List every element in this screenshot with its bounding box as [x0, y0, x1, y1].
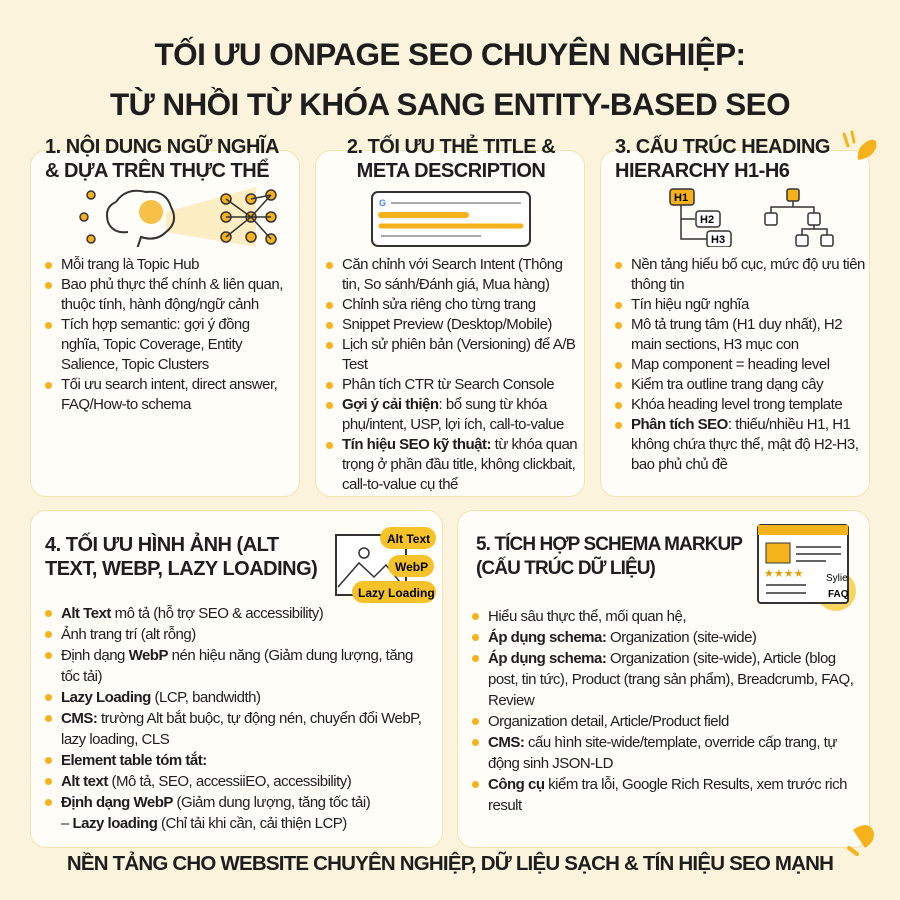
bullet list 5: Áp dụng schema: Organization (site-wide), Article (blog post, tin tức), Product (trang sản phẩm), Breadcrumb, FAQ, Review: [488, 650, 853, 709]
heading 5: (CẤU TRÚC DỮ LIỆU): [476, 558, 655, 579]
heading 2: [347, 134, 556, 182]
icon: splash bottom right: [846, 825, 874, 856]
panel: heading hierarchy: [600, 150, 870, 497]
bullet list 2: Căn chỉnh với Search Intent (Thông tin, So sánh/Đánh giá, Mua hàng): [342, 256, 562, 293]
bullet list 4: Ảnh trang trí (alt rỗng): [61, 626, 196, 643]
heading 4: TEXT, WEBP, LAZY LOADING): [45, 558, 317, 580]
heading 4: 4. TỐI ƯU HÌNH ẢNH (ALT: [45, 534, 279, 556]
bullet list 3: Kiểm tra outline trang dạng cây: [631, 376, 823, 393]
icon: structured data window: [757, 524, 856, 611]
icon: heading tree: [669, 188, 834, 247]
icon: image tags: Alt Text: [387, 532, 430, 546]
bullet list 2: Chỉnh sửa riêng cho từng trang: [342, 296, 536, 313]
bullet list 4: – Lazy loading (Chỉ tải khi cần, cải thiện LCP): [61, 815, 347, 832]
bullet list 4: CMS: trường Alt bắt buộc, tự động nén, chuyển đổi WebP, lazy loading, CLS: [61, 710, 421, 748]
icon: brain network: [79, 187, 277, 247]
bullet list 5: Áp dụng schema: Organization (site-wide): [488, 629, 756, 646]
panel: title & meta: [315, 150, 585, 497]
heading 3: [615, 134, 830, 182]
icon: structured data window: Sylie: [826, 573, 848, 584]
bullet list 4: Định dạng WebP nén hiệu năng (Giảm dung lượng, tăng tốc tải): [61, 647, 413, 685]
icon: structured data window: ★★★★: [764, 568, 804, 580]
heading 4: [45, 532, 317, 580]
footer tagline: NỀN TẢNG CHO WEBSITE CHUYÊN NGHIỆP, DỮ LIỆU SẠCH & TÍN HIỆU SEO MẠNH: [67, 852, 833, 875]
heading 2: 2. TỐI ƯU THẺ TITLE &: [347, 136, 555, 158]
bullet list 5: Organization detail, Article/Product field: [488, 713, 729, 730]
heading 5: [476, 532, 742, 579]
bullet list 4: Element table tóm tắt:: [61, 752, 207, 769]
icon: search snippet: G: [379, 198, 386, 208]
heading 2: META DESCRIPTION: [357, 160, 545, 182]
icon: heading tree: H3: [711, 234, 725, 246]
bullet list 1: Tối ưu search intent, direct answer, FAQ/How-to schema: [61, 376, 277, 413]
bullet list 5: [472, 608, 853, 814]
icon: search snippet: [371, 191, 531, 247]
bullet list 3: Tín hiệu ngữ nghĩa: [631, 296, 749, 313]
bullet list 4: Alt text (Mô tả, SEO, accessiiEO, accessibility): [61, 773, 351, 790]
bullet list 1: Bao phủ thực thể chính & liên quan, thuộc tính, hành động/ngữ cảnh: [61, 276, 283, 313]
panel: images: [30, 510, 443, 848]
bullet list 5: Hiểu sâu thực thể, mối quan hệ,: [488, 608, 686, 625]
bullet list 2: Tín hiệu SEO kỹ thuật: từ khóa quan trọng ở phần đầu title, không clickbait, call-to-value cụ thể: [342, 436, 577, 493]
panel: schema: [457, 510, 870, 848]
bullet list 2: Lịch sử phiên bản (Versioning) để A/B Test: [342, 336, 575, 373]
heading 1: & DỰA TRÊN THỰC THỂ: [45, 160, 269, 182]
icon: structured data window: FAQ: [828, 589, 849, 600]
heading 3: HIERARCHY H1-H6: [615, 160, 789, 182]
bullet list 1: [45, 256, 283, 413]
bullet list 4: Định dạng WebP (Giảm dung lượng, tăng tốc tải): [61, 794, 370, 811]
panel: semantic content: [30, 150, 300, 497]
heading 5: 5. TÍCH HỢP SCHEMA MARKUP: [476, 534, 742, 555]
bullet list 5: Công cụ kiểm tra lỗi, Google Rich Results, xem trước rich result: [488, 776, 847, 814]
bullet list 1: Tích hợp semantic: gợi ý đồng nghĩa, Topic Coverage, Entity Salience, Topic Clusters: [61, 316, 250, 373]
bullet list 3: Mô tả trung tâm (H1 duy nhất), H2 main sections, H3 mục con: [631, 316, 842, 353]
bullet list 2: [326, 256, 577, 493]
heading 1: [45, 134, 279, 182]
bullet list 3: Khóa heading level trong template: [631, 396, 842, 413]
icon: heading tree: H2: [700, 214, 714, 226]
title: TỐI ƯU ONPAGE SEO CHUYÊN NGHIỆP:: [155, 36, 745, 72]
icon: image tags: [335, 527, 436, 603]
bullet list 2: Phân tích CTR từ Search Console: [342, 376, 554, 393]
heading 3: 3. CẤU TRÚC HEADING: [615, 136, 830, 158]
title: [110, 36, 790, 122]
bullet list 3: Nền tảng hiểu bố cục, mức độ ưu tiên thông tin: [631, 256, 865, 293]
bullet list 2: Snippet Preview (Desktop/Mobile): [342, 316, 552, 333]
bullet list 2: Gợi ý cải thiện: bổ sung từ khóa phụ/intent, USP, lợi ích, call-to-value: [342, 396, 564, 433]
icon: image tags: Lazy Loading: [358, 586, 435, 600]
icon: image tags: WebP: [395, 560, 428, 574]
bullet list 4: Lazy Loading (LCP, bandwidth): [61, 689, 260, 706]
heading 1: 1. NỘI DUNG NGỮ NGHĨA: [45, 136, 279, 158]
bullet list 5: CMS: cấu hình site-wide/template, override cấp trang, tự động sinh JSON-LD: [488, 734, 837, 772]
bullet list 3: Map component = heading level: [631, 356, 830, 373]
bullet list 3: Phân tích SEO: thiếu/nhiều H1, H1 không chứa thực thể, mật độ H2-H3, bao phủ chủ đề: [631, 416, 858, 473]
icon: heading tree: H1: [674, 192, 688, 204]
title: TỪ NHỒI TỪ KHÓA SANG ENTITY-BASED SEO: [110, 86, 790, 122]
icon: splash top right: [842, 130, 876, 160]
bullet list 4: Alt Text mô tả (hỗ trợ SEO & accessibility): [61, 605, 323, 622]
bullet list 4: [45, 605, 421, 832]
bullet list 3: [615, 256, 865, 473]
bullet list 1: Mỗi trang là Topic Hub: [61, 256, 199, 273]
